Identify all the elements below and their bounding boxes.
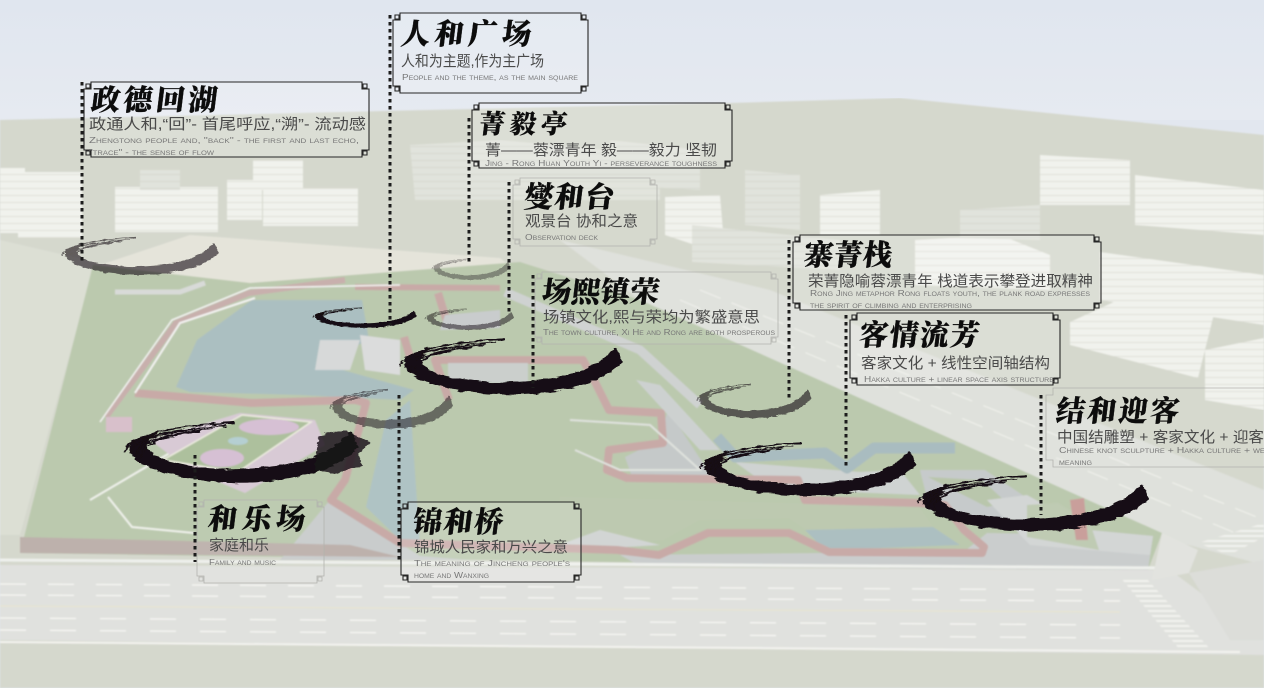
panel: zhaijing plank road — [793, 233, 1101, 310]
brush ring: zhengde huihu node — [62, 237, 219, 275]
description: 观景台 协和之意 — [525, 212, 638, 230]
grey plazas near lake — [315, 340, 360, 370]
description: 锦城人民家和万兴之意 — [414, 538, 568, 556]
panel: xiehe terrace — [513, 175, 657, 246]
english note: Observation deck — [525, 232, 598, 242]
english note: Family and music — [209, 557, 277, 567]
leader line: zhengde huihu — [80, 82, 84, 262]
brush ring: zhaijing plank road node — [697, 384, 811, 418]
english note: Hakka culture + linear space axis structure — [864, 374, 1054, 384]
description: 政通人和,“回”- 首尾呼应,“溯”- 流动感 — [89, 115, 366, 133]
brush ring: keqing liufang node — [700, 443, 916, 496]
panel frame — [197, 500, 324, 583]
english note: home and Wanxing — [414, 570, 489, 580]
panel frame — [1046, 388, 1264, 467]
description: 菁——蓉漂青年 毅——毅力 坚韧 — [485, 142, 717, 159]
heading: 菁毅亭 — [477, 104, 570, 141]
panel frame — [401, 502, 581, 582]
water body — [176, 300, 414, 400]
sky background — [0, 0, 1264, 120]
english note: Zhengtong people and, "back" - the first and last echo, — [89, 135, 359, 145]
white surrounding buildings — [0, 140, 1264, 410]
panel: zhengde huihu — [84, 78, 369, 157]
english note — [810, 288, 1090, 310]
leader line: keqing liufang — [844, 315, 848, 467]
english note — [1059, 445, 1264, 467]
heading: 政德回湖 — [89, 78, 220, 119]
panel frame — [84, 82, 369, 157]
panel: jinhe bridge — [401, 500, 581, 582]
beige plot — [100, 235, 535, 285]
english note: the spirit of climbing and enterprising — [810, 300, 972, 310]
panel: jiehe yingke — [1046, 388, 1264, 467]
leader line: jingyi pavilion — [468, 118, 470, 262]
panel frame — [793, 235, 1101, 310]
leader line: changxi zhenrong — [532, 275, 534, 388]
brush ring: hele field node — [125, 422, 370, 483]
description: 客家文化 + 线性空间轴结构 — [861, 355, 1050, 372]
grey channel in the east half — [625, 410, 713, 477]
panel frame — [472, 103, 732, 168]
playground — [150, 413, 325, 493]
english note: Jing - Rong Huan Youth Yi - perseverance toughness — [485, 158, 717, 168]
heading: 场熙镇荣 — [540, 270, 662, 311]
brush ring: renhe plaza node — [313, 308, 417, 328]
heading: 结和迎客 — [1054, 389, 1182, 430]
red marker sculpture — [1070, 498, 1088, 540]
english note: People and the theme, as the main square — [402, 72, 578, 82]
leader line: jinhe bridge — [398, 395, 400, 562]
heading: 燮和台 — [522, 175, 619, 216]
leader line: zhaijing plank road — [788, 240, 790, 398]
description: 荣菁隐喻蓉漂青年 栈道表示攀登进取精神 — [808, 273, 1093, 290]
english note: "trace" - the sense of flow — [89, 147, 214, 157]
brush ring: changxi zhenrong node — [400, 339, 623, 395]
leader line: hele field — [194, 455, 196, 562]
description: 家庭和乐 — [209, 537, 269, 554]
panel frame — [513, 178, 657, 246]
panel: keqing liufang — [850, 313, 1060, 385]
panel frame — [850, 313, 1060, 385]
panel: changxi zhenrong — [535, 270, 778, 344]
english note: The meaning of Jincheng people's — [414, 558, 570, 568]
red walkway — [135, 360, 984, 555]
panel: hele field — [197, 497, 324, 583]
description: 人和为主题,作为主广场 — [401, 53, 544, 70]
brush ring: jinhe bridge node — [330, 389, 453, 429]
english note: The town culture, Xi He and Rong are both prosperous — [543, 327, 775, 337]
heading: 锦和桥 — [411, 500, 506, 541]
leader line: renhe plaza — [388, 15, 392, 325]
leader line: xiehe terrace — [508, 182, 510, 312]
main road — [0, 565, 1264, 655]
english note: meaning — [1059, 457, 1092, 467]
leader line: jiehe yingke — [1040, 395, 1042, 515]
heading: 寨菁栈 — [802, 233, 895, 274]
heading: 和乐场 — [206, 497, 308, 538]
english note: Chinese knot sculpture + Hakka culture + welcome — [1059, 445, 1264, 455]
english note — [89, 135, 359, 157]
panel: renhe plaza — [393, 12, 588, 93]
stepped lawn outlines — [570, 420, 700, 470]
panel: jingyi pavilion — [472, 103, 732, 168]
heading: 人和广场 — [399, 12, 534, 53]
heading: 客情流芳 — [857, 313, 982, 354]
english note — [414, 558, 570, 580]
south plaza — [620, 533, 1153, 570]
brush ring: xiehe terrace node — [425, 309, 514, 330]
green site — [20, 262, 1162, 570]
english note: Rong Jing metaphor Rong floats youth, the plank road expresses — [810, 288, 1090, 298]
brush ring: jiehe yingke node — [918, 476, 1149, 531]
south lawn — [560, 497, 933, 547]
diagonal road — [560, 240, 1264, 565]
panel frame — [535, 272, 778, 344]
brush ring: jingyi pavilion node — [432, 259, 510, 280]
description: 场镇文化,熙与荣均为繁盛意思 — [543, 308, 760, 326]
description: 中国结雕塑 + 客家文化 + 迎客 — [1057, 429, 1264, 446]
panel frame — [393, 13, 588, 93]
